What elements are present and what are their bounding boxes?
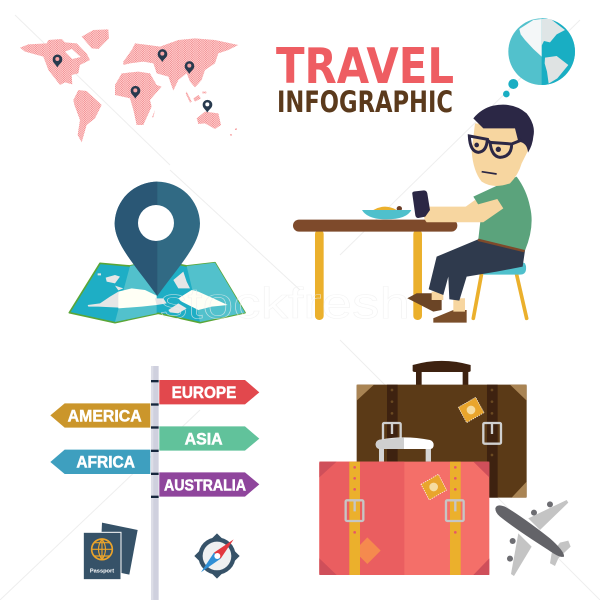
pin: [115, 182, 200, 296]
airplane: [495, 500, 571, 576]
map pins: [53, 49, 212, 113]
compass: [194, 533, 240, 579]
title: [276, 38, 454, 119]
left land: [88, 273, 157, 308]
passport: [83, 523, 138, 580]
table: [293, 206, 457, 320]
suitcases and plane: [319, 361, 571, 576]
right land: [155, 272, 228, 313]
man at table: [293, 177, 532, 323]
title: TRAVEL: [276, 38, 454, 95]
globe: [503, 18, 575, 97]
sign: Australia: [159, 472, 259, 497]
sign: Europe: EUROPE: [172, 383, 236, 402]
red suitcase: [319, 437, 489, 575]
sign: Australia: AUSTRALIA: [164, 477, 246, 494]
passport: Passport: [90, 568, 114, 574]
folded map: [69, 260, 245, 323]
title: INFOGRAPHIC: [277, 85, 453, 119]
chair: [473, 263, 527, 318]
sign: Europe: [159, 380, 259, 404]
brown suitcase: [357, 361, 527, 498]
sign: Asia: [159, 426, 259, 451]
sign: Asia: ASIA: [185, 430, 223, 449]
americas: [20, 29, 109, 142]
world map: [20, 29, 238, 142]
map with location pin: [69, 182, 245, 323]
sign: America: [50, 403, 150, 428]
watermark: stockfresh: [160, 279, 410, 328]
person: [407, 177, 532, 323]
old world: [115, 38, 238, 136]
head: [469, 105, 534, 186]
sign: Africa: [50, 450, 150, 474]
signpost: [50, 366, 259, 600]
sign: Africa: AFRICA: [76, 453, 135, 472]
sign: America: AMERICA: [68, 406, 142, 425]
